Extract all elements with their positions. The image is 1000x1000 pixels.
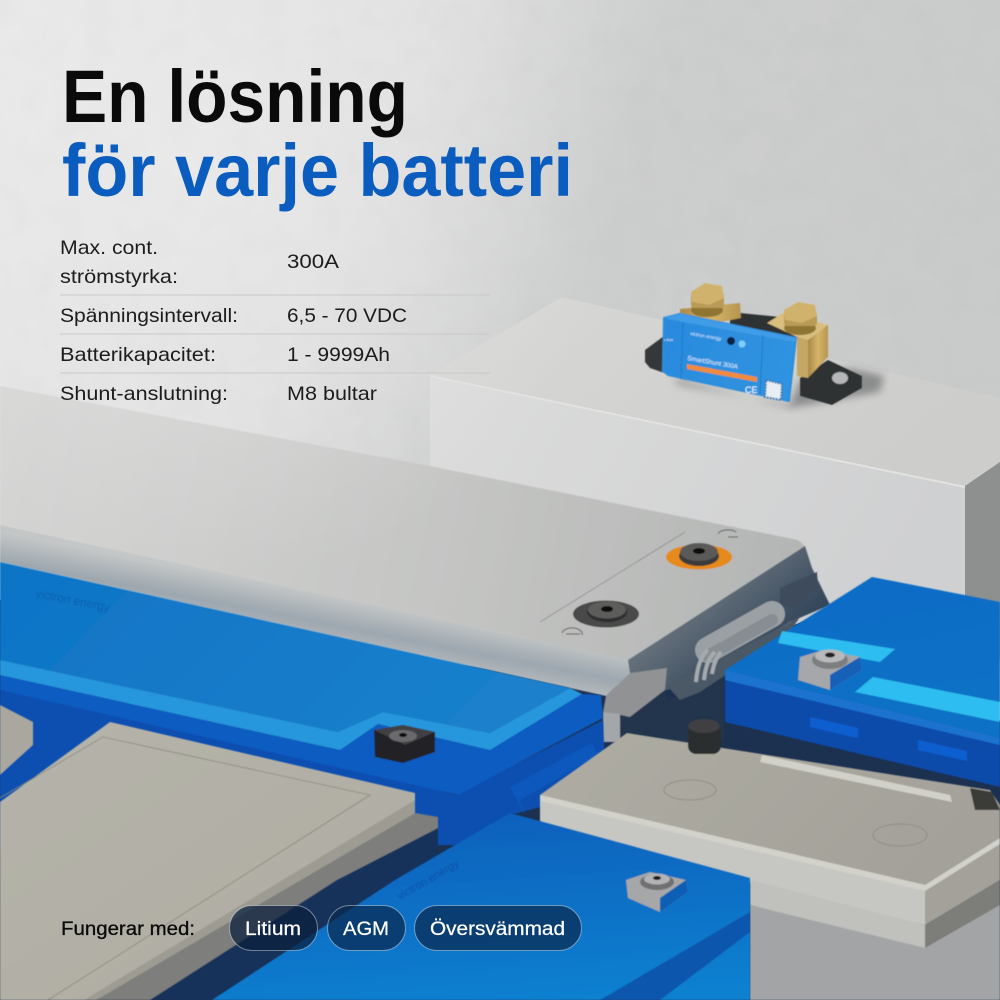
shunt LED and indicators: [727, 337, 735, 345]
vent slot: [760, 755, 952, 802]
title line 1: En lösning: [62, 55, 408, 138]
right blue lithium battery: [725, 577, 1000, 787]
shunt CE mark: CE: [745, 385, 758, 395]
works-with label: Fungerar med:: [61, 919, 195, 940]
row: shunt connection: Shunt-anslutning:: [60, 383, 228, 405]
steel stud: [832, 372, 848, 384]
concrete wall background: [0, 0, 1000, 720]
bottom-left tan battery: [0, 722, 438, 1000]
black knob: [688, 719, 721, 754]
embossed logo: victron energy: [396, 857, 462, 903]
negative symbol: [562, 628, 582, 635]
row: battery capacity: 1 - 9999Ah: [287, 344, 390, 366]
left brass terminal: [680, 283, 741, 326]
pill: Översvämmad: [414, 906, 582, 950]
row: shunt connection: M8 bultar: [287, 383, 378, 405]
row: battery capacity: [60, 344, 390, 366]
shunt base plate: [645, 312, 862, 405]
lid inset line: [0, 737, 370, 1000]
positive symbol: [718, 530, 738, 537]
row: max continuous current: strömstyrka:: [60, 266, 178, 288]
bottom blue lithium battery: [212, 813, 750, 1000]
top-left partial tan battery: [0, 705, 33, 775]
positive terminal: [666, 543, 732, 570]
row: voltage range: 6,5 - 70 VDC: [287, 305, 407, 327]
large grey battery: [0, 386, 830, 742]
cyan stripes: [778, 631, 1000, 722]
shunt logo label: victron energy: [690, 331, 722, 343]
embossed circles: [664, 780, 927, 846]
concrete block pedestal: [430, 297, 1000, 660]
lid seam line: [540, 532, 685, 622]
row: max continuous current: 300A: [287, 251, 339, 273]
shunt orange stripe: [687, 364, 757, 382]
right grey flooded battery: [540, 719, 1000, 1000]
specifications table: [60, 237, 490, 405]
steel terminal hex nut: [798, 650, 862, 690]
row: max continuous current: Max. cont.: [60, 237, 158, 259]
shunt port labels: • Aux: [664, 337, 673, 342]
mounting tab: [510, 743, 598, 815]
shunt blue housing: [663, 314, 796, 401]
negative terminal: [573, 600, 639, 628]
pill: Litium: Litium: [245, 918, 301, 940]
battery side slots: [810, 717, 967, 761]
title: [62, 55, 573, 212]
shunt shadow: [672, 368, 884, 408]
steel terminal hex nut: [626, 872, 688, 912]
row: shunt connection: [60, 383, 378, 405]
row: voltage range: [60, 305, 407, 327]
row: voltage range: Spänningsintervall:: [60, 305, 238, 327]
cable: [668, 614, 800, 700]
row: battery capacity: Batterikapacitet:: [60, 344, 216, 366]
logo on lid: victron energy: [34, 586, 111, 614]
shadow gaps between batteries: [0, 600, 1000, 1000]
corner latch: [970, 788, 1000, 810]
shunt QR code: [765, 380, 782, 400]
right brass terminal: [767, 302, 828, 378]
long blue lithium battery: [0, 562, 606, 850]
soft light overlay behind text: [0, 0, 640, 600]
product: SmartShunt 300A: [645, 283, 884, 408]
row: max continuous current: [60, 237, 339, 288]
black hex terminal: [374, 725, 435, 763]
title line 2: för varje batteri: [62, 129, 573, 212]
pill: AGM: AGM: [343, 918, 389, 940]
pill: Litium: [230, 906, 318, 950]
pill: Översvämmad: Översvämmad: [430, 918, 565, 940]
shunt model label: SmartShunt 300A: [687, 355, 739, 371]
pill: AGM: [328, 906, 406, 950]
